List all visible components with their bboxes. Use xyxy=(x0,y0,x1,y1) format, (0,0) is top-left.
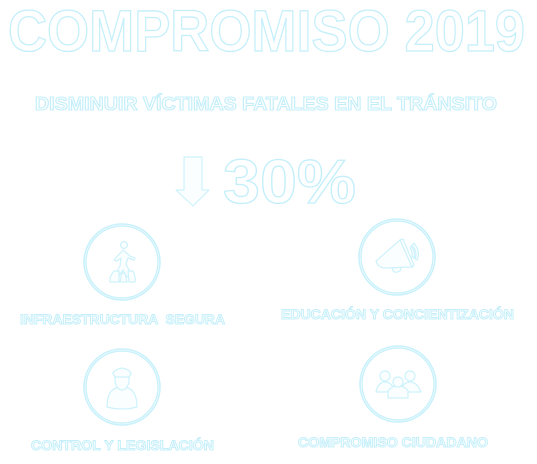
panel: control y legislación xyxy=(31,349,214,453)
label: COMPROMISO CIUDADANO xyxy=(298,434,488,450)
icon: megaphone in circle xyxy=(359,219,435,295)
panel: educación y concientización xyxy=(281,219,514,322)
panel: infraestructura segura xyxy=(20,224,225,327)
reduction percentage: 30% xyxy=(223,148,356,217)
label: INFRAESTRUCTURA SEGURA xyxy=(20,311,225,327)
icon: pedestrian in circle xyxy=(84,224,160,300)
icon: group of people in circle xyxy=(360,346,436,422)
icon: down arrow xyxy=(176,157,209,206)
panel: compromiso ciudadano xyxy=(298,346,488,450)
label: EDUCACIÓN Y CONCIENTIZACIÓN xyxy=(281,305,514,322)
icon: officer in circle xyxy=(84,349,160,425)
subtitle: DISMINUIR VÍCTIMAS FATALES EN EL TRÁNSITO xyxy=(35,93,497,114)
label: CONTROL Y LEGISLACIÓN xyxy=(31,436,214,453)
